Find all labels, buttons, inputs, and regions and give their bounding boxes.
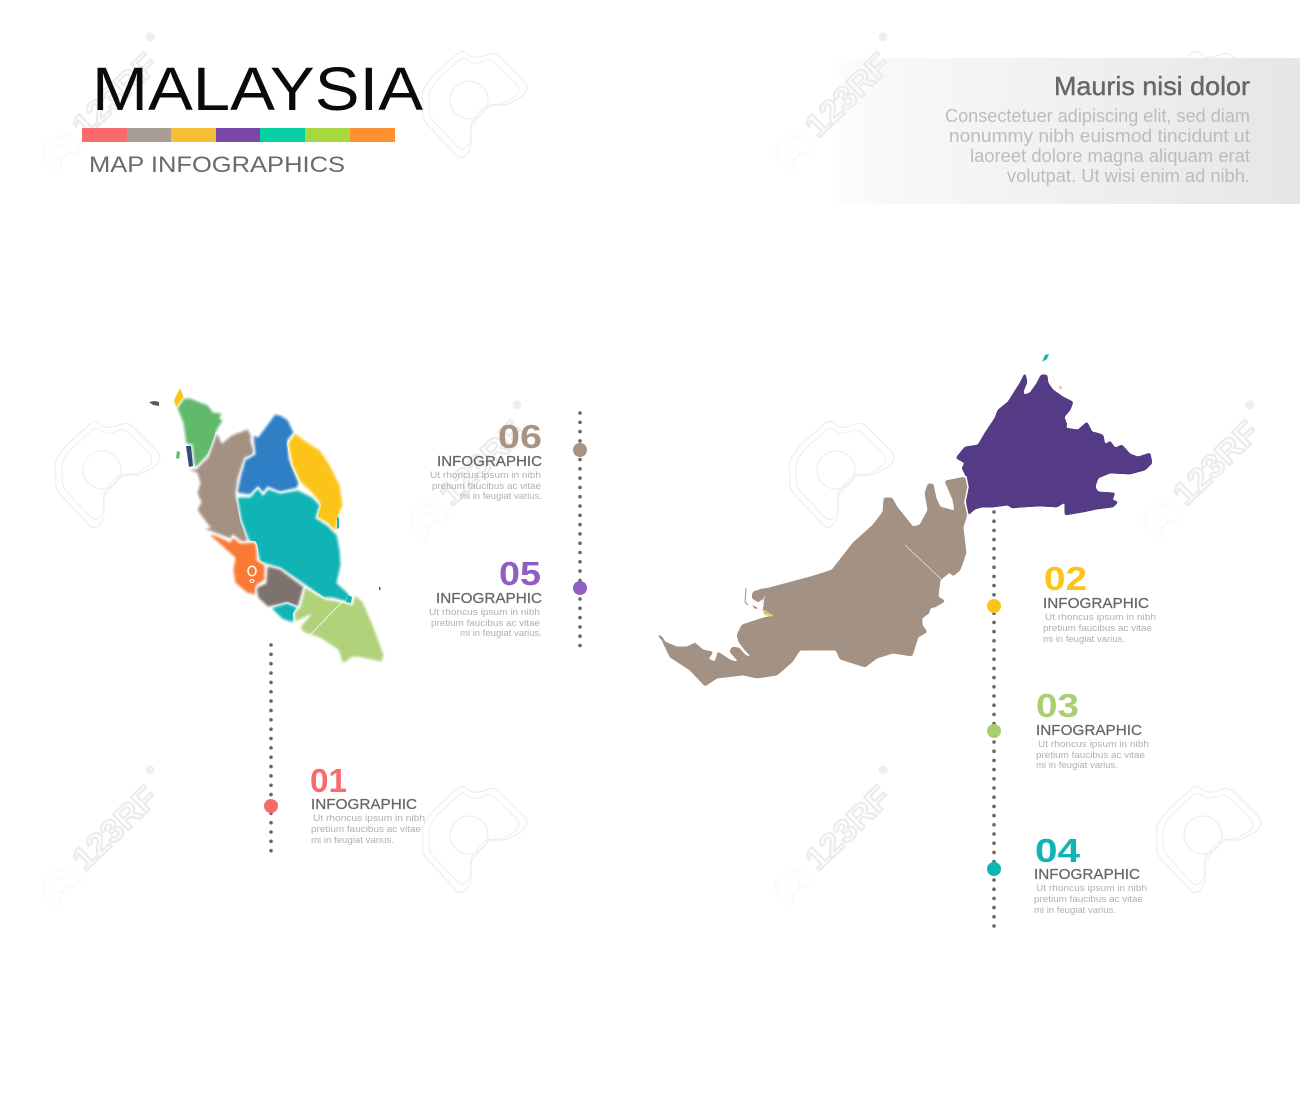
callout 04: INFOGRAPHIC [1034, 866, 1140, 883]
panel: grey gradient intro band [838, 58, 1300, 204]
callout 02: 02 [1044, 560, 1087, 597]
state: Kedah [177, 398, 223, 468]
state: Melaka [271, 603, 297, 623]
callout 05: Ut rhoncus ipsum in nibh [429, 607, 540, 618]
text: 123RF [798, 779, 898, 877]
state: Terengganu [288, 433, 343, 532]
callout 06: Ut rhoncus ipsum in nibh [430, 470, 541, 481]
marker 05 [573, 581, 587, 595]
callout 01: 01 [310, 762, 347, 799]
island: east coast sliver [337, 517, 339, 529]
callout 04: mi in feugiat varius. [1034, 905, 1116, 916]
callout 02: Ut rhoncus ipsum in nibh [1045, 612, 1156, 623]
state: Penang mainland [186, 446, 193, 467]
callout 04: pretium faucibus ac vitae [1034, 894, 1143, 905]
intro text block: nonummy nibh euismod tincidunt ut [949, 126, 1250, 146]
text: 123RF [1166, 414, 1266, 512]
callout 02: INFOGRAPHIC [1043, 595, 1149, 612]
callout 06: mi in feugiat varius. [460, 491, 542, 502]
dotted timeline: right [992, 512, 996, 927]
state: Perlis [174, 388, 184, 407]
callout 05: INFOGRAPHIC [436, 590, 542, 607]
subtitle: MAP INFOGRAPHICS [89, 152, 345, 177]
map: Peninsular Malaysia [149, 388, 384, 664]
state: Selangor [208, 534, 265, 595]
state: Brunei detail [745, 588, 773, 616]
callout 06: 06 [498, 418, 542, 455]
callout 01: Ut rhoncus ipsum in nibh [313, 813, 425, 824]
callout 03: Ut rhoncus ipsum in nibh [1038, 739, 1149, 750]
callout 02: pretium faucibus ac vitae [1043, 623, 1152, 634]
text: 123RF [65, 779, 165, 877]
callout 05: 05 [499, 555, 541, 592]
intro text block: Consectetuer adipiscing elit, sed diam [945, 106, 1250, 126]
callout 06 [430, 418, 542, 502]
callout 03: 03 [1036, 687, 1079, 724]
island: Penang [176, 451, 180, 459]
marker 02 [987, 599, 1001, 613]
callout 05 [429, 555, 542, 639]
callout 04 [1034, 832, 1147, 916]
callout 06: pretium faucibus ac vitae [432, 481, 541, 492]
callout 05: mi in feugiat varius. [460, 628, 542, 639]
text: 123RF [65, 46, 165, 144]
intro text block: laoreet dolore magna aliquam erat [970, 146, 1250, 166]
callout 04: Ut rhoncus ipsum in nibh [1036, 883, 1147, 894]
callout 05: pretium faucibus ac vitae [431, 618, 540, 629]
island: Langkawi [149, 401, 159, 406]
callout 03: mi in feugiat varius. [1036, 760, 1118, 771]
callout 06: INFOGRAPHIC [437, 453, 542, 470]
marker 06 [573, 443, 587, 457]
state: Sarawak [656, 477, 967, 686]
callout 04: 04 [1035, 832, 1081, 869]
intro heading: Mauris nisi dolor [1054, 71, 1250, 101]
callout 03 [1036, 687, 1149, 771]
state: Sabah [956, 373, 1152, 515]
marker 03 [987, 724, 1001, 738]
callout 02 [1043, 560, 1156, 645]
island: Banggi [1042, 354, 1049, 362]
callout 01: mi in feugiat varius. [311, 835, 394, 846]
title: MALAYSIA [92, 55, 423, 123]
callout 03: INFOGRAPHIC [1036, 722, 1142, 739]
callout 01: INFOGRAPHIC [311, 796, 417, 813]
map: East Malaysia [656, 354, 1152, 686]
state: Negeri Sembilan [256, 566, 304, 607]
dotted timeline: left [269, 645, 273, 853]
state: Pahang [237, 488, 349, 602]
callout 01 [310, 762, 425, 846]
state: Kelantan [237, 414, 299, 495]
intro text block [945, 106, 1250, 186]
intro text block: volutpat. Ut wisi enim ad nibh. [1007, 166, 1250, 186]
dotted timeline: middle [578, 413, 582, 647]
callout 03: pretium faucibus ac vitae [1036, 750, 1145, 761]
text: 123RF [798, 46, 898, 144]
state: Perak [186, 429, 254, 542]
state: Johor [294, 587, 384, 664]
marker 04 [987, 862, 1001, 876]
marker 01 [264, 799, 278, 813]
callout 02: mi in feugiat varius. [1043, 634, 1125, 645]
text: 123RF [432, 414, 532, 512]
colour bar [82, 128, 395, 142]
callout 01: pretium faucibus ac vitae [311, 824, 421, 835]
